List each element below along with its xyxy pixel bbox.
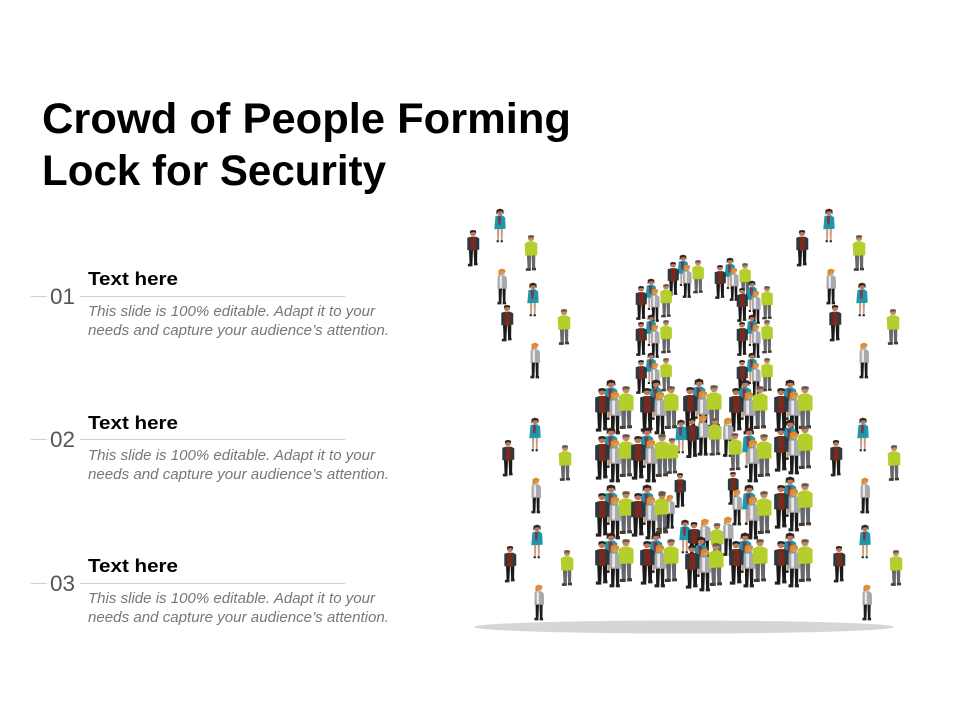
list item 02	[31, 413, 389, 483]
title: Crowd of People Forming	[42, 95, 571, 143]
ground shadow	[474, 620, 894, 634]
list item 01	[31, 269, 389, 339]
heading 03: Text here	[88, 556, 178, 576]
description 02: This slide is 100% editable. Adapt it to your	[88, 448, 376, 464]
description 03: This slide is 100% editable. Adapt it to your	[88, 591, 376, 607]
number 02: 02	[50, 427, 75, 452]
number 01: 01	[50, 284, 75, 309]
description 03: needs and capture your audience’s attention.	[88, 610, 389, 626]
lock shackle made of people	[636, 255, 773, 396]
scattered people: upper left	[467, 209, 570, 378]
list item 03	[31, 556, 389, 626]
description 01: This slide is 100% editable. Adapt it to your	[88, 304, 376, 320]
number 03: 03	[50, 571, 75, 596]
scattered people: lower right	[830, 418, 902, 620]
heading 02: Text here	[88, 413, 178, 433]
description 01: needs and capture your audience’s attention.	[88, 323, 389, 339]
title: Lock for Security	[42, 147, 386, 195]
description 02: needs and capture your audience’s attention.	[88, 467, 389, 483]
lock body made of people	[595, 379, 813, 591]
heading 01: Text here	[88, 269, 178, 289]
scattered people: upper right	[796, 209, 899, 378]
scattered people: lower left	[502, 418, 573, 620]
title	[42, 95, 571, 195]
